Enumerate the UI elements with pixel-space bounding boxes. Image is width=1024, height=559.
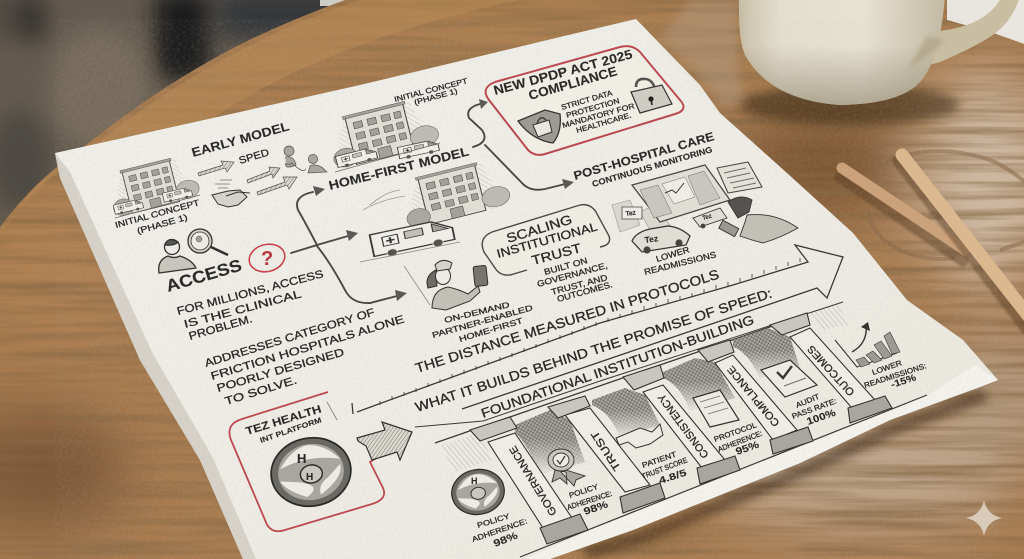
callout: scaling institutional trust: TRUST bbox=[530, 240, 583, 268]
icon: red question mark bbox=[246, 241, 288, 275]
dashboard screen bbox=[612, 165, 730, 232]
long arrow with ruler bbox=[352, 245, 843, 414]
icon: handshake in pillar bbox=[616, 424, 663, 448]
icon: bar chart with arrow bbox=[835, 322, 900, 367]
callout: scaling institutional trust: INSTITUTIONAL bbox=[495, 219, 599, 261]
icon: red question mark: ? bbox=[261, 248, 273, 270]
metric: patient trust score: TRUST SCORE bbox=[641, 455, 689, 481]
text: addresses category of friction: ADDRESSES CATEGORY OF bbox=[203, 307, 376, 370]
caption: initial concept phase 1 bbox=[114, 197, 200, 236]
metric: patient trust score bbox=[641, 450, 689, 487]
caption: on-demand partner-enabled home-first: ON-DEMAND bbox=[443, 300, 511, 325]
mug shadow bbox=[740, 85, 960, 125]
nurse with phone bbox=[404, 260, 488, 310]
home-first ambulance bbox=[360, 190, 460, 262]
icon: person with magnifier bbox=[159, 229, 228, 273]
text: for millions access: PROBLEM. bbox=[188, 313, 254, 343]
home-first hospital bbox=[398, 157, 512, 229]
metric: audit pass rate: AUDIT bbox=[794, 392, 821, 410]
heading: what it builds behind the promise of speed: WHAT IT BUILDS BEHIND THE PROMISE OF SPEED: bbox=[413, 286, 774, 415]
heading: early model: EARLY MODEL bbox=[190, 119, 291, 160]
metric: policy adherence second 98 percent: 98% bbox=[582, 499, 610, 518]
callout: scaling institutional trust: OUTCOMES. bbox=[556, 279, 614, 304]
tez car: Tez bbox=[644, 233, 659, 245]
metric: audit pass rate bbox=[791, 392, 838, 428]
pillar labels: OUTCOMES bbox=[805, 343, 857, 398]
panel: new DPDP act 2025 compliance: PROTECTION bbox=[565, 96, 620, 120]
caption: on-demand partner-enabled home-first bbox=[431, 300, 534, 344]
metric: policy adherence 98 percent: ADHERENCE: bbox=[471, 516, 528, 544]
napkin shadow bbox=[585, 395, 985, 553]
hatched arches bbox=[515, 328, 800, 474]
heading: post-hospital care: POST-HOSPITAL CARE bbox=[572, 129, 716, 183]
icon: steering wheel: H bbox=[297, 451, 306, 466]
caption: lower readmissions: LOWER bbox=[655, 244, 691, 264]
icon: clipboard in pillar bbox=[693, 390, 739, 427]
pillar shafts, capitals and bases bbox=[470, 313, 892, 544]
metric: lower readmissions: -15% bbox=[890, 372, 918, 391]
panel: new DPDP act 2025 compliance: MANDATORY FOR bbox=[561, 101, 636, 130]
heading: home-first model: HOME-FIRST MODEL bbox=[327, 144, 471, 193]
blurred floor behind the table bbox=[0, 0, 1024, 240]
heading: foundational institution-building: FOUNDATIONAL INSTITUTION-BUILDING bbox=[479, 312, 756, 421]
panel: new DPDP act 2025 compliance bbox=[486, 46, 684, 155]
metric: lower readmissions: READMISSIONS: bbox=[863, 361, 927, 390]
caption: initial concept phase 1: (PHASE 1) bbox=[136, 212, 189, 236]
panel: new DPDP act 2025 compliance: NEW DPDP ACT 2025 bbox=[492, 46, 634, 98]
callout: scaling institutional trust: GOVERNANCE, bbox=[536, 260, 608, 289]
metric: protocol adherence: PROTOCOL bbox=[713, 420, 758, 444]
subheading: continuous monitoring: CONTINUOUS MONITORING bbox=[591, 144, 714, 189]
tez van small bbox=[693, 208, 727, 228]
text: for millions access: IS THE CLINICAL bbox=[183, 288, 303, 331]
callout: scaling institutional trust bbox=[482, 205, 614, 304]
metric: governance small wheel bbox=[448, 465, 508, 519]
icon: padlock bbox=[631, 79, 672, 113]
metric: protocol adherence bbox=[713, 420, 764, 458]
caption: initial concept top: (PHASE 1) bbox=[413, 86, 459, 107]
metric: policy adherence second 98 percent bbox=[566, 482, 613, 518]
metric: lower readmissions: LOWER bbox=[871, 358, 904, 377]
panel: new DPDP act 2025 compliance: STRICT DATA bbox=[560, 88, 613, 112]
metric: audit pass rate: PASS RATE: bbox=[791, 396, 838, 421]
metric: policy adherence 98 percent bbox=[471, 512, 528, 550]
icon: people bbox=[284, 146, 327, 173]
arrow: platform to pillars bbox=[357, 422, 412, 460]
speed arrows bbox=[198, 161, 297, 195]
tez van small: Tez bbox=[702, 214, 713, 222]
text: addresses category of friction: POORLY DESIGNED bbox=[215, 347, 346, 395]
callout: scaling institutional trust: TRUST, AND bbox=[550, 272, 609, 297]
icon: ribbon badge bbox=[548, 449, 585, 486]
metric: audit pass rate: 100% bbox=[805, 408, 837, 428]
watermark star bbox=[966, 500, 1002, 536]
icon: handshake bbox=[212, 180, 250, 207]
metric: governance small wheel: H bbox=[471, 476, 478, 486]
callout: scaling institutional trust: BUILT ON bbox=[543, 255, 588, 277]
caption: lower readmissions: READMISSIONS bbox=[643, 249, 718, 277]
branch arrows from access bbox=[291, 99, 574, 303]
panel: tez health platform bbox=[229, 392, 384, 531]
top centre hospital with ambulances bbox=[324, 95, 441, 172]
panel: new DPDP act 2025 compliance: COMPLIANCE bbox=[527, 63, 619, 103]
wooden sticks bbox=[840, 155, 1024, 328]
pillar labels: COMPLIANCE bbox=[725, 363, 782, 429]
caption: on-demand partner-enabled home-first: PARTNER-ENABLED bbox=[431, 303, 534, 340]
panel: new DPDP act 2025 compliance: HEALTHCARE. bbox=[575, 111, 632, 135]
text: addresses category of friction bbox=[203, 307, 406, 408]
text: addresses category of friction: FRICTION HOSPITALS ALONE bbox=[209, 313, 406, 383]
coffee mug bbox=[739, 0, 1020, 105]
text: for millions access bbox=[176, 268, 325, 343]
foundation pillars bbox=[415, 302, 927, 557]
tez car bbox=[622, 207, 690, 254]
panel: tez health platform: INT PLATFORM bbox=[259, 415, 323, 445]
caption: initial concept phase 1: INITIAL CONCEPT bbox=[114, 197, 200, 230]
caption: initial concept top bbox=[393, 76, 469, 107]
speckled wood left of mug bbox=[660, 0, 745, 108]
pillar labels bbox=[507, 343, 857, 518]
coffee ring stain bbox=[868, 151, 1024, 259]
heading: the distance measured in protocols: THE DISTANCE MEASURED IN PROTOCOLS bbox=[413, 267, 721, 376]
metric: patient trust score: 4.8/5 bbox=[658, 467, 689, 487]
pillar labels: GOVERNANCE bbox=[507, 443, 560, 518]
pillar labels: TRUST bbox=[589, 428, 624, 473]
metric: policy adherence second 98 percent: ADHERENCE: bbox=[566, 489, 613, 512]
clipboard bbox=[717, 162, 762, 193]
heading: access: ACCESS bbox=[164, 256, 244, 296]
text: addresses category of friction: TO SOLVE. bbox=[223, 374, 299, 408]
metric: policy adherence 98 percent: 98% bbox=[492, 531, 520, 550]
patient with phone bbox=[719, 197, 798, 243]
icon: shield bbox=[518, 110, 560, 143]
caption: lower readmissions bbox=[643, 244, 718, 277]
icon: steering wheel bbox=[266, 432, 356, 512]
top-left model: initial concept illustration bbox=[105, 153, 201, 218]
caption: on-demand partner-enabled home-first: HOME-FIRST bbox=[458, 316, 524, 344]
tez car: Tez bbox=[625, 210, 636, 218]
caption: initial concept top: INITIAL CONCEPT bbox=[393, 76, 469, 104]
callout: scaling institutional trust: SCALING bbox=[504, 212, 574, 246]
icon: steering wheel: H bbox=[306, 472, 313, 483]
pillar labels: CONSISTENCY bbox=[656, 391, 711, 460]
label: sped: SPED bbox=[238, 147, 271, 167]
metric: policy adherence second 98 percent: POLICY bbox=[568, 482, 599, 500]
panel: tez health platform: TEZ HEALTH bbox=[244, 403, 323, 438]
icon: scroll with check bbox=[761, 360, 817, 397]
metric: protocol adherence: ADHERENCE: bbox=[716, 429, 764, 454]
metric: patient trust score: PATIENT bbox=[641, 450, 678, 470]
metric: protocol adherence: 95% bbox=[734, 440, 761, 458]
text: for millions access: FOR MILLIONS, ACCESS bbox=[176, 268, 325, 318]
metric: policy adherence 98 percent: POLICY bbox=[476, 512, 511, 530]
